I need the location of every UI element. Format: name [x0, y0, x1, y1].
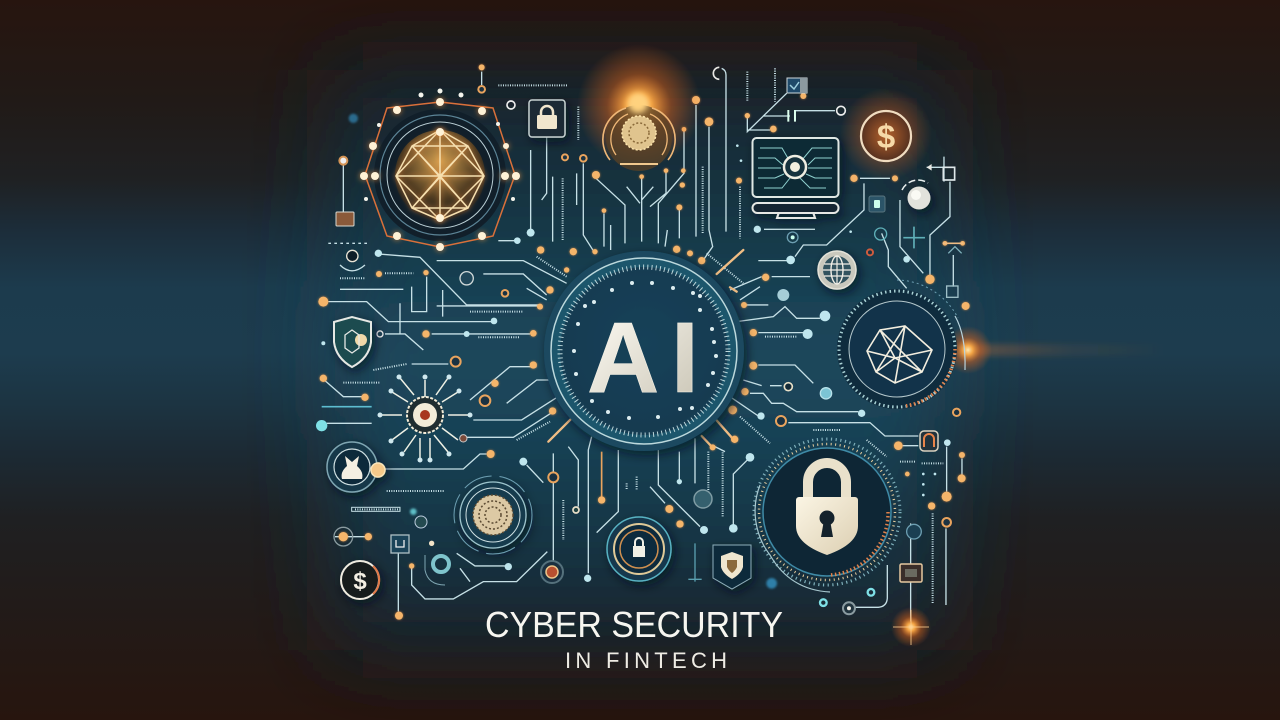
icon: virus — [378, 374, 472, 462]
icon: small tile upper right — [869, 196, 885, 212]
central AI hub — [544, 251, 744, 451]
icon: padlock top small — [529, 100, 565, 137]
icon: shield bottom — [713, 545, 751, 589]
icon: dollar coin bottom-left: $ — [353, 568, 367, 595]
icon: dollar coin top right: $ — [877, 118, 895, 155]
icon: small square nodes left — [336, 212, 427, 553]
icon: money bag circle — [327, 442, 385, 492]
icon: small lock right — [920, 431, 938, 451]
icon: network polygon right — [837, 280, 965, 409]
icon: sphere — [902, 180, 930, 210]
AI label: I — [671, 302, 699, 414]
circuit traces: lower left — [316, 357, 637, 620]
icon: globe network top-left — [360, 88, 520, 251]
right orange flare — [944, 326, 1165, 374]
icon: shield left — [334, 317, 371, 367]
icon: glowing fingerprint top centre — [577, 44, 701, 171]
icon: red node disc — [541, 561, 563, 583]
icon: swirl tile — [425, 555, 449, 585]
title — [485, 604, 783, 673]
AI label: A — [587, 302, 659, 414]
icon: small globe — [818, 251, 856, 289]
icon: dollar coin top right — [840, 88, 932, 180]
bottom-right orange flare — [891, 607, 931, 647]
icon: grey disc — [694, 490, 712, 508]
circuit traces: lower right — [650, 362, 966, 622]
icon: dollar coin bottom-left — [341, 561, 379, 599]
icon: framed tile lower right — [900, 564, 922, 582]
icon: lock disc bottom centre — [607, 517, 671, 581]
icon: computer monitor — [752, 138, 838, 218]
subtitle: IN FINTECH — [565, 648, 727, 673]
icon: large padlock — [754, 439, 900, 592]
circuit traces: upper left — [318, 64, 640, 350]
icon: checkbox top — [787, 78, 807, 93]
title: CYBER SECURITY — [485, 604, 783, 645]
circuit traces: upper right — [639, 67, 970, 339]
icon: fingerprint disc bottom-left — [454, 476, 532, 554]
